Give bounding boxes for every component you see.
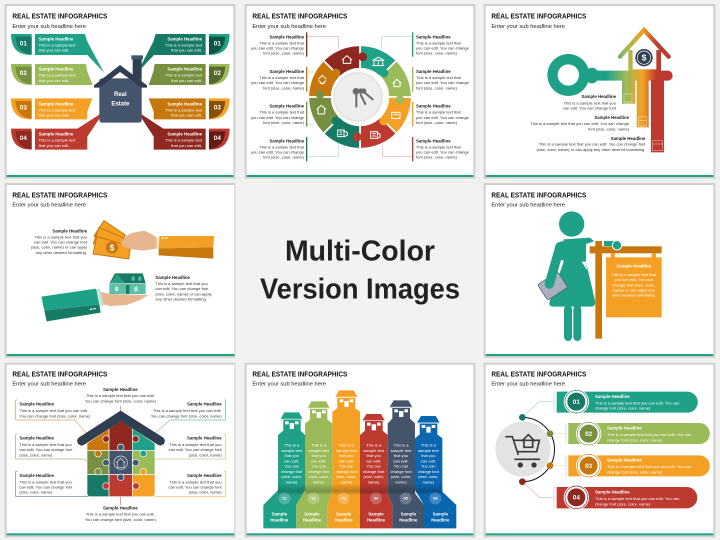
column 02: can edit. [311,458,326,463]
column 04: change font [363,469,385,474]
callout left 01 [11,34,104,73]
subtitle: Enter your sub headline here [491,24,565,30]
column 06: Headline [431,517,450,522]
text block 2: This is a sample text that you can edit. You can change [530,121,630,126]
pill 03 [568,453,710,478]
text block 1: can edit. You can change font [563,106,617,111]
panel: sign board: change font (size, color, [612,282,655,287]
column 03 [328,390,360,528]
column 01: sample text [281,448,303,453]
column 02: sample text [308,448,330,453]
key tooth icons [624,94,663,151]
column 02: change font [308,469,330,474]
column 06 [415,416,456,528]
central caption [260,236,460,305]
connectors [522,392,566,508]
text bottom: Sample Headline [103,506,138,511]
text left 3: you can edit. You can change [251,115,305,120]
text right 1 [151,402,222,418]
column 01: This is a [284,443,300,448]
key with gradient [547,30,673,152]
text right 4: you can edit. You can change [416,150,470,155]
panel: sign board: name) or can apply any [613,288,656,292]
column 02 [296,401,332,528]
text block 3: (size, color, name) or can apply any other desired formatting. [536,147,645,152]
title: REAL ESTATE INFOGRAPHICS [12,12,107,21]
text block 1: This is a sample text that you [564,100,616,105]
column 01: name) [286,479,298,484]
column 06: name) [423,479,435,484]
text block 2 [530,115,630,131]
callout right 01: 01 [214,41,221,48]
column 02: Headline [303,517,322,522]
callout left 01: This is a sample text [39,42,76,47]
icon: keys in centre disc [332,71,384,123]
icon: woman figure [538,211,622,341]
text block 3: This is a sample text that you can edit. You can change font [539,142,646,147]
text left 1 [251,32,307,57]
callout left 02 [11,64,93,85]
text block bottom: Sample Headline [155,275,191,280]
title: REAL ESTATE INFOGRAPHICS [491,369,586,378]
text block top: can edit. You can change font [34,240,88,245]
pill 03: This is a sample text that you can edit. You can [607,464,691,469]
callout right 02: that you can edit. [171,78,202,83]
text right 3: This is a sample text that [416,110,462,115]
panel: sign board: This is a sample text that [611,272,657,277]
callout left 04 [11,112,104,150]
title: REAL ESTATE INFOGRAPHICS [491,12,586,21]
text right 1: This is a sample text that [416,40,462,45]
text block 2: Sample Headline [594,115,630,120]
text left 1: This is a sample text that [259,40,305,45]
text block bottom [155,275,213,302]
pill 02: This is a sample text that you can edit. You can [607,432,691,437]
text right 2: Sample Headline [416,69,451,74]
column 02: Sample [304,511,320,516]
text left 3: font (size, color, name) [263,120,305,125]
column 04: Sample [368,511,384,516]
column 05: Sample [401,511,417,516]
panel: puzzle house [5,363,235,537]
pill 04: change font (size, color, name) [595,501,651,506]
callout right 04: 04 [214,135,221,142]
column 01: Headline [270,517,289,522]
text left 2: This is a sample text that [259,75,305,80]
column 03: 03 [341,496,347,501]
callout left 01: 01 [20,41,27,48]
column 05: can edit. [393,458,409,463]
icon: banknotes: $ [110,244,115,253]
text bottom: This is a sample text that you can edit. [86,512,155,517]
callout right 02 [149,64,230,85]
text right 3: font (size, color, name) [416,120,458,125]
column 01: can edit. [284,458,299,463]
icon: roof [82,416,160,441]
column 05: 05 [403,496,409,501]
text left 2: Sample Headline [269,69,305,74]
column 04: This is a [366,443,382,448]
column 04: (size, color, [363,474,384,479]
pill 01: 01 [573,399,580,406]
text left 3 [251,102,307,127]
text left 2: (size, color, name) [19,452,53,457]
pill 02: change font (size, color, name) [607,437,663,442]
callout left 02: This is a sample text [39,73,76,78]
text right 2 [412,67,470,92]
column 01: that you [284,453,299,458]
icon: hand giving money [121,231,214,259]
panel: sign board [606,257,662,317]
pill 04: This is a sample text that you can edit. You can [595,496,679,501]
text right 3: (size, color, name) [189,490,222,495]
pill 01: Sample Headline [595,394,630,399]
column 03: change font [336,469,358,474]
callout right 03: Sample Headline [167,101,203,106]
pill 04 [557,485,697,510]
callout right 04 [137,112,230,150]
text left 2 [251,67,307,92]
panel: shopping cart list [484,363,715,537]
text left 2 [19,436,73,457]
column 01: (size, color, [281,474,302,479]
text left 1: you can edit. You can change [251,46,305,51]
column 04: Headline [367,517,386,522]
column 01: change font [281,469,303,474]
text block 1 [563,94,617,111]
text left 4: Sample Headline [269,138,305,143]
column 05: (size, color, [391,474,411,479]
text left 4: you can edit. You can change [251,150,305,155]
icon: dollar coin [635,49,653,66]
callout right 03 [149,98,230,119]
icon: central house: Estate [111,101,130,107]
text right 2: Sample Headline [187,436,222,441]
connector lines [16,400,225,505]
callout right 04: Sample Headline [167,132,203,137]
text left 1: This is a sample text that you can edit. [19,408,88,413]
column 03: Headline [335,517,353,522]
text right 1: Sample Headline [187,402,222,407]
column 03: Sample [336,511,352,516]
text right 2: This is a sample text that you [169,442,222,447]
callout left 04: This is a sample text [39,138,76,143]
pill 04: Sample Headline [595,490,630,495]
pill 02: Sample Headline [607,426,642,431]
panel: house columns [245,363,475,537]
pill 03: Sample Headline [607,458,642,463]
text left 2: font (size, color, name) [263,85,305,90]
callout left 03: Sample Headline [39,101,74,106]
segment icons [317,56,401,138]
title: REAL ESTATE INFOGRAPHICS [12,369,107,378]
text right 1: Sample Headline [416,34,451,39]
pill 04: 04 [573,495,580,502]
callout left 03: that you can edit. [39,113,69,118]
text block top: any other desired formatting. [35,250,87,255]
column 02: name) [313,479,325,484]
text right 3: Sample Headline [187,473,222,478]
text block bottom: (size, color, name) or can apply [155,291,213,296]
column 03: can edit. [339,458,354,463]
column 03: (size, color, [336,474,357,479]
text right 3: Sample Headline [416,104,451,109]
column 05 [388,400,424,528]
text left 2: Sample Headline [19,436,55,441]
pill 02: 02 [585,431,593,438]
column 04: You can [366,464,381,469]
column 01 [263,412,305,528]
column 02: You can [311,464,326,469]
callout left 02: 02 [20,70,27,77]
callout left 02: Sample Headline [39,67,74,72]
icon: house emblem [114,456,127,469]
column 05: Headline [399,517,418,522]
icon: puzzle house [87,421,155,497]
column 03: name) [341,479,353,484]
column 02: that you [311,453,326,458]
callout left 02: that you can edit. [39,78,69,83]
panel: sign board: other desired formatting. [612,293,656,298]
callout left 03: This is a sample text [39,107,76,112]
text right 4: font (size, color, name) [416,155,458,160]
central caption: Multi-Color [285,236,435,268]
panel: money and house hands [5,183,235,358]
column 06: 06 [433,496,438,501]
text left 3: This is a sample text that you [19,479,72,484]
subtitle: Enter your sub headline here [491,203,565,209]
callout right 02: Sample Headline [167,67,203,72]
subtitle: Enter your sub headline here [12,24,86,30]
text block top: This is a sample text that you [35,234,87,239]
column 01: You can [284,464,299,469]
text left 3: Sample Headline [269,104,305,109]
icon: banknotes [93,221,131,259]
column 06: can edit. [421,458,436,463]
panel: key and house [484,4,715,179]
column 06: (size, color, [418,474,439,479]
callout right 01 [137,34,230,73]
callout left 01: that you can edit. [39,48,69,53]
pill 02 [568,421,710,446]
icon: sign post [590,241,662,339]
text block 3: Sample Headline [611,136,646,141]
column 06: You can [421,464,436,469]
column 06: that you [421,453,436,458]
icon: dollar coin: $ [642,53,647,63]
puzzle ring [308,45,412,149]
callout right 02: 02 [214,70,221,77]
text left 3 [19,473,73,495]
callout right 01: Sample Headline [167,36,203,41]
text right 2: you can edit. You can change [416,80,470,85]
column 04: name) [368,479,380,484]
text right 1: You can change font (size, color, name) [151,413,222,418]
subtitle: Enter your sub headline here [252,24,326,30]
text block top: Sample Headline [52,228,88,233]
column 06: change font [418,469,440,474]
panel: speech bubble house [5,4,235,179]
text right 4: Sample Headline [416,138,451,143]
text right 1: This is a sample text that you can edit. [153,408,222,413]
subtitle: Enter your sub headline here [491,382,565,388]
callout right 01: This is a sample text [165,42,203,47]
pill 01: This is a sample text that you can edit. You can [595,400,679,405]
column 05: change font [390,469,412,474]
text top: You can change font (size, color, name) [85,398,156,403]
text left 2: you can edit. You can change [251,80,305,85]
panel: sign board: Sample Headline [616,264,652,269]
column 05: name) [395,479,407,484]
callout right 04: that you can edit. [171,143,202,148]
subtitle: Enter your sub headline here [252,382,326,388]
column 03: that you [339,453,354,458]
text block top: (size, color, name) or can apply [31,245,88,250]
text right 2 [169,436,223,457]
text left 1 [19,402,91,418]
callout right 03: that you can edit. [171,113,202,118]
column 04 [360,414,392,528]
text bottom: You can change font (size, color, name) [85,517,156,522]
title: REAL ESTATE INFOGRAPHICS [491,191,586,200]
text left 1: You can change font (size, color, name) [19,413,91,418]
connector lines [307,37,413,157]
pill 03: change font (size, color, name) [607,469,663,474]
column 03: You can [339,464,354,469]
callout right 02: This is a sample text [165,73,203,78]
text left 4: This is a sample text that [259,144,305,149]
text left 3: This is a sample text that [259,110,305,115]
text right 2: (size, color, name) [189,452,222,457]
text right 3: you can edit. You can change [416,115,470,120]
column 05: that you [394,453,408,458]
callout left 03: 03 [20,105,27,112]
text right 1: you can edit. You can change [416,46,470,51]
text right 1: font (size, color, name) [416,51,458,56]
text right 4: This is a sample text that [416,144,462,149]
text right 4 [412,137,470,161]
text top [85,387,156,403]
pill 01: change font (size, color, name) [595,406,651,411]
text block top [31,228,88,255]
text right 2: font (size, color, name) [416,85,458,90]
panel: agent with sign [484,183,715,358]
column 03: This is a [339,443,355,448]
column 02: This is a [311,443,327,448]
text block bottom: can edit. You can change font [155,286,209,291]
callout right 04: This is a sample text [165,138,203,143]
panel: circular puzzle [245,4,475,179]
subtitle: Enter your sub headline here [12,382,86,388]
callout right 03: This is a sample text [165,107,203,112]
column 04: that you [366,453,381,458]
column 02: (size, color, [308,474,329,479]
text left 1: Sample Headline [269,34,305,39]
text left 1: Sample Headline [19,402,55,407]
text block bottom: any other desired formatting. [155,296,207,302]
text left 3: (size, color, name) [19,490,53,495]
text right 3 [412,102,470,127]
icon: central house [94,55,147,123]
callout left 04: Sample Headline [39,132,74,137]
text right 3: This is a sample text that you [169,479,222,484]
icon: cart disc [495,421,551,477]
text right 3: can edit. You can change font [169,484,223,490]
title: REAL ESTATE INFOGRAPHICS [252,12,347,21]
callout left 04: 04 [20,135,27,142]
column 05: You can [394,464,408,469]
text left 1: font (size, color, name) [263,51,305,56]
text left 3: can edit. You can change font [19,484,73,490]
icon: central house: Real [114,92,127,98]
text right 2: This is a sample text that [416,75,462,80]
callout right 03: 03 [214,105,221,112]
text right 1 [412,32,470,57]
column 03: sample text [336,448,358,453]
text left 2: can edit. You can change font [19,447,73,452]
text block 3 [536,136,646,152]
column 01: 01 [282,496,288,501]
text left 4: font (size, color, name) [263,155,305,160]
text right 2: can edit. You can change font [169,447,223,452]
pill 01 [557,389,698,414]
pill 03: 03 [585,463,593,470]
title: REAL ESTATE INFOGRAPHICS [252,369,347,378]
callout left 04: that you can edit. [39,143,69,148]
column 01: Sample [272,511,288,516]
text left 2: This is a sample text that you [19,442,72,447]
text left 4 [251,137,307,161]
text right 3 [169,473,223,495]
column 05: sample text [391,448,412,453]
callout right 01: that you can edit. [171,48,202,53]
column 04: can edit. [366,458,381,463]
subtitle: Enter your sub headline here [12,203,86,209]
text top: This is a sample text that you can edit. [86,393,155,398]
text bottom [85,506,156,522]
column 06: This is a [421,443,437,448]
callout left 01: Sample Headline [39,36,74,41]
column 05: This is a [393,443,409,448]
text block 2: font (size, color, name) [588,126,630,131]
column 02: 02 [311,496,317,501]
central caption: Version Images [260,273,460,305]
text block bottom: This is a sample text that you [155,281,208,286]
column 04: sample text [363,448,385,453]
text block 1: Sample Headline [581,94,617,99]
column 06: Sample [433,511,449,516]
title: REAL ESTATE INFOGRAPHICS [12,191,107,200]
icon: hand holding house [41,273,149,321]
callout left 03 [11,98,92,119]
column 06: sample text [418,448,440,453]
panel: sign board: you can edit. You can [614,277,653,282]
arc with dots [519,414,554,485]
text top: Sample Headline [103,387,138,392]
text left 3: Sample Headline [19,473,55,478]
column 04: 04 [374,496,379,501]
